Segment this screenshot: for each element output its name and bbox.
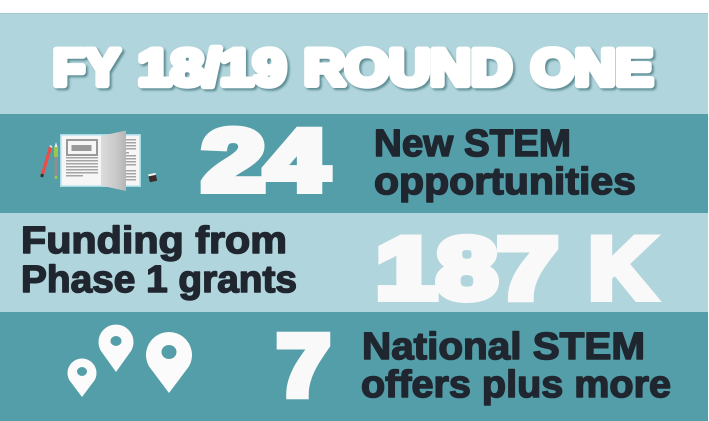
panel: national STEM offers <box>0 312 708 421</box>
icon: middle pin <box>99 325 133 372</box>
title: FY <box>53 39 120 96</box>
text: new STEM opportunities: opportunities <box>374 161 636 203</box>
icon: green pen <box>54 142 58 179</box>
icon: book page spread <box>60 130 141 191</box>
panel: new STEM opportunities <box>0 113 708 213</box>
icon: large pin <box>146 332 192 393</box>
number: 24: 24 <box>202 113 328 209</box>
title <box>53 39 653 96</box>
icon: red pencil <box>42 146 52 177</box>
title: ONE <box>531 39 653 96</box>
icon: eraser <box>148 173 157 182</box>
text: new STEM opportunities: New STEM <box>374 123 571 165</box>
text: funding from phase 1 grants: Phase 1 grants <box>21 259 297 301</box>
number: 187 K <box>376 221 654 317</box>
text: national STEM offers plus more: National STEM <box>362 326 645 368</box>
number: 187 K: 187 <box>376 221 558 317</box>
text: new STEM opportunities <box>374 123 636 203</box>
text: national STEM offers plus more: offers plus more <box>361 364 671 406</box>
icon: three map pins <box>68 325 192 397</box>
panel: funding from phase 1 grants <box>0 213 708 317</box>
icon: small pin <box>68 359 97 397</box>
icon: open book with pens <box>42 130 157 191</box>
text: funding from phase 1 grants: Funding from <box>21 220 287 262</box>
title: ROUND <box>304 39 512 96</box>
panel: title band <box>0 13 708 114</box>
title: 18/19 <box>138 39 286 96</box>
number: 187 K: K <box>589 221 654 317</box>
text: national STEM offers plus more <box>361 326 671 406</box>
text: funding from phase 1 grants <box>21 220 297 301</box>
number: 7: 7 <box>277 318 330 414</box>
